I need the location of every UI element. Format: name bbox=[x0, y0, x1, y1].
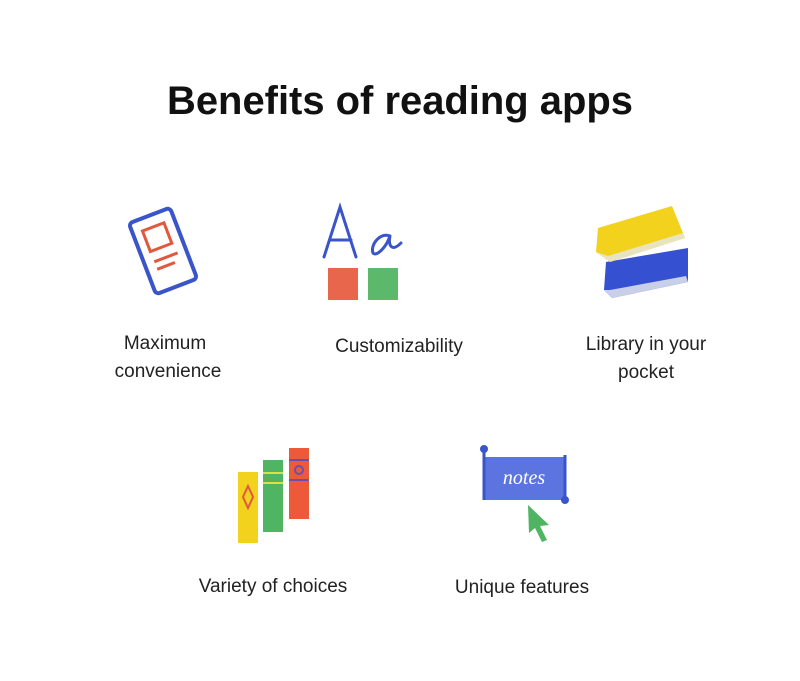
icon: book spines bbox=[238, 448, 309, 543]
label: Variety of choices: Variety of choices bbox=[199, 576, 347, 597]
title: Benefits of reading apps bbox=[167, 79, 633, 123]
label: Maximum convenience: Maximum bbox=[124, 333, 206, 354]
label: Customizability: Customizability bbox=[335, 336, 463, 357]
icon: Aa fonts bbox=[324, 207, 401, 300]
label: Maximum convenience bbox=[115, 333, 221, 382]
icon: notes flag with cursor: notes bbox=[503, 467, 545, 489]
label: Unique features: Unique features bbox=[455, 577, 589, 598]
icon: phone bbox=[129, 208, 197, 294]
label: Library in your pocket: pocket bbox=[618, 362, 675, 383]
icon: notes flag with cursor bbox=[480, 445, 569, 542]
icon: books bbox=[596, 206, 688, 298]
label: Library in your pocket: Library in your bbox=[586, 334, 707, 355]
label: Maximum convenience: convenience bbox=[115, 361, 221, 382]
label: Library in your pocket bbox=[586, 334, 707, 383]
